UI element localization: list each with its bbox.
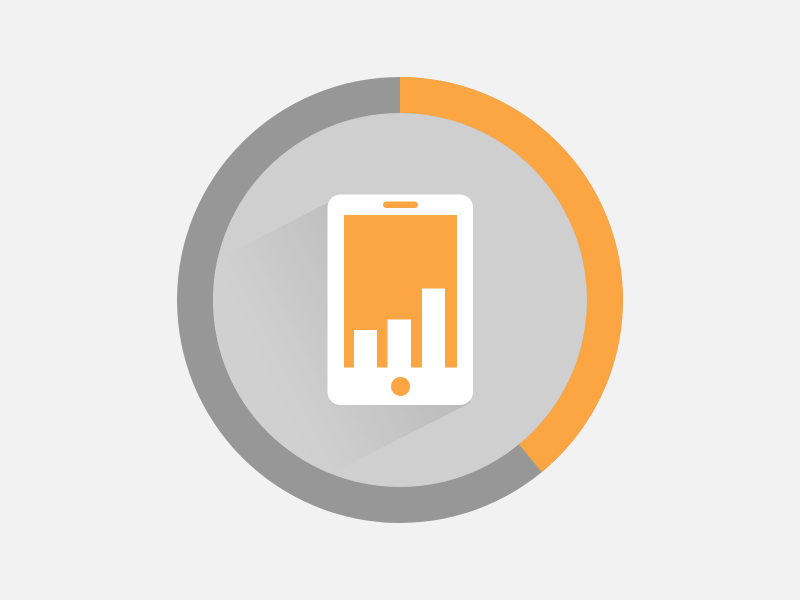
long shadow of phone — [213, 202, 470, 474]
speaker — [383, 202, 418, 208]
inner disc — [213, 113, 587, 487]
donut chart ring — [177, 77, 623, 523]
screen — [344, 215, 457, 368]
home button — [391, 377, 410, 396]
phone body — [328, 194, 473, 405]
ring track: grey — [177, 77, 623, 523]
ring segment: orange — [400, 77, 623, 472]
bar chart on screen — [354, 288, 445, 368]
icon: smartphone — [328, 194, 473, 405]
infographic: donut with phone icon — [177, 77, 623, 523]
